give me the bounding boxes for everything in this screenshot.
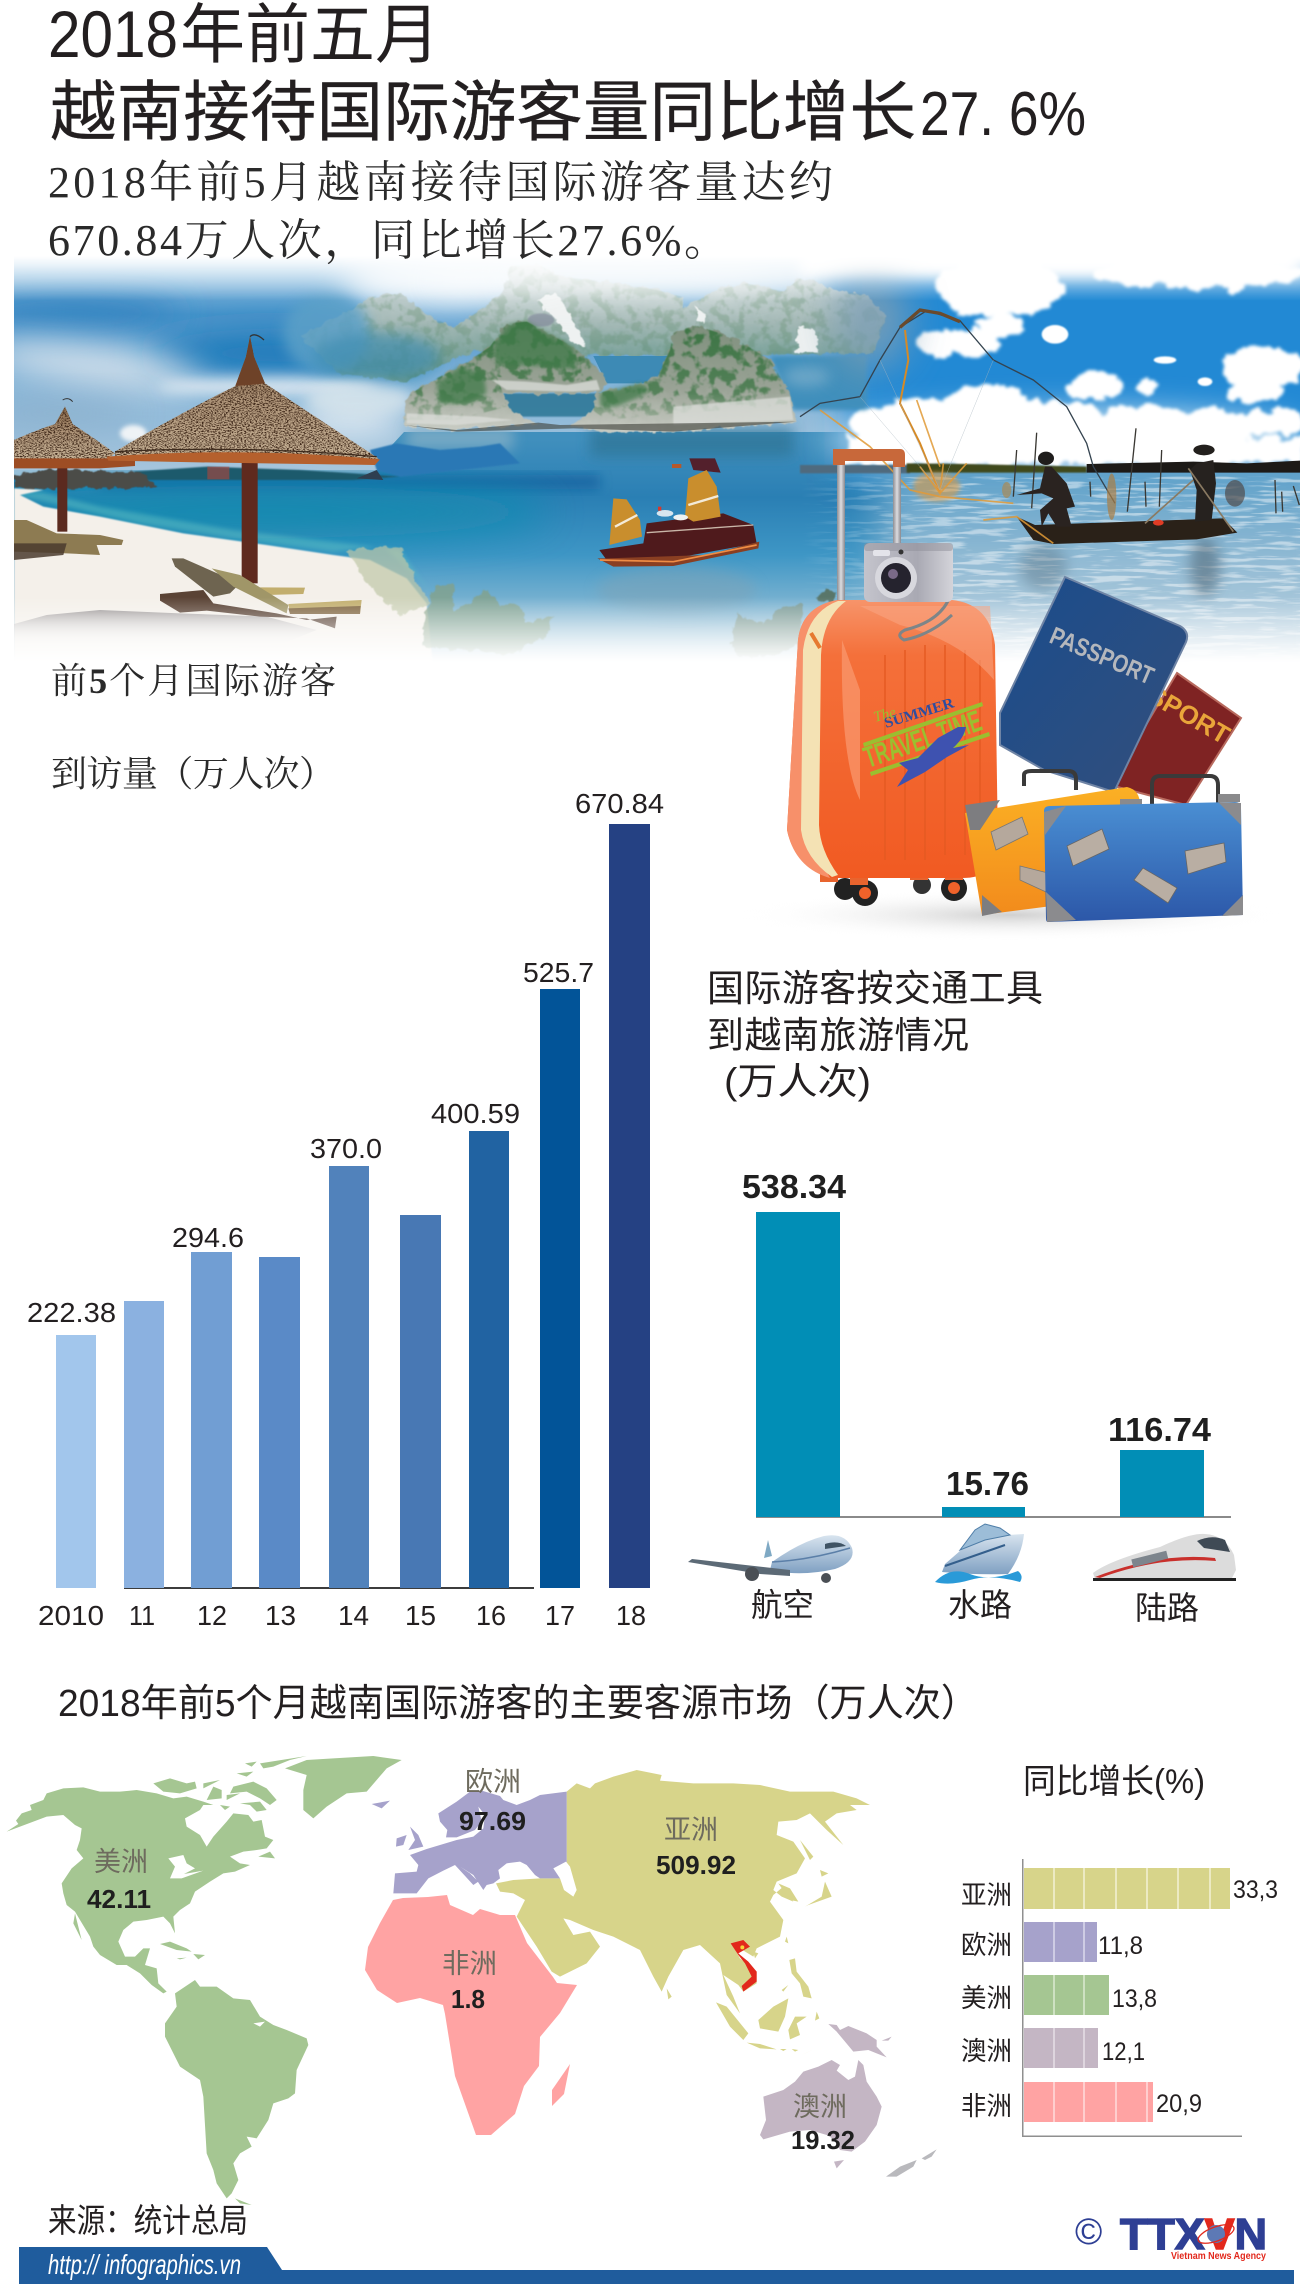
label: Oceania	[791, 2092, 855, 2155]
row: Europe: 11,8	[1098, 1932, 1143, 1960]
bar: land	[1108, 1411, 1212, 1517]
icon: airplane	[688, 1535, 853, 1583]
icon: small straw umbrella	[14, 399, 135, 560]
bar 2016	[431, 1098, 520, 1631]
sticker: summer travel time: SUMMER	[882, 695, 956, 732]
row: Asia: 33,3	[1233, 1876, 1278, 1904]
label: Asia	[656, 1815, 736, 1880]
sticker: summer travel time: The	[872, 704, 898, 726]
bar 2018: 670.84	[575, 788, 664, 819]
bar 2017: 17	[545, 1600, 575, 1631]
icon: large straw umbrella	[107, 335, 380, 628]
region: Americas and Iceland	[7, 1756, 402, 2205]
heading: left chart	[51, 661, 336, 794]
logo: TTXVN: TTXVN	[1120, 2210, 1267, 2259]
row: Africa: 非洲	[961, 2091, 1012, 2121]
bar 2013: 13	[265, 1600, 296, 1631]
sticker: summer travel time	[860, 695, 990, 787]
bar 2012	[172, 1222, 244, 1631]
label: Africa	[442, 1949, 497, 2014]
bar chart: arrivals per year	[27, 788, 664, 1631]
scene: right sky	[800, 237, 1300, 473]
region: Africa	[365, 1895, 577, 2135]
icon: limestone islands	[403, 322, 797, 457]
scene: sky and streaks left	[0, 298, 423, 442]
title: 年前五月	[180, 0, 440, 71]
logo: TTXVN: ©	[1075, 2211, 1102, 2252]
bar: water: 15.76	[946, 1465, 1029, 1502]
heading: transport chart	[707, 968, 1043, 1102]
bar: air	[742, 1168, 847, 1517]
scene: lake water right	[856, 470, 1300, 654]
source note: 来源：统计总局	[48, 2202, 248, 2239]
labels: transport names: 陆路	[1135, 1590, 1199, 1626]
bar 2017	[523, 957, 594, 1631]
labels: transport names: 航空	[751, 1587, 814, 1623]
label: Oceania: 澳洲	[793, 2092, 847, 2122]
bar 2015	[400, 1215, 441, 1631]
title: 越南接待国际游客量同比增长	[50, 75, 916, 149]
label: Americas: 42.11	[87, 1884, 151, 1914]
scene: karst mountains	[283, 263, 887, 417]
bar 2018: 18	[616, 1600, 646, 1631]
subtitle	[48, 158, 833, 265]
row: Europe: 欧洲	[961, 1930, 1012, 1960]
row: Africa: 20,9	[1156, 2090, 1202, 2118]
icon: red passport	[1098, 654, 1241, 805]
row: Oceania	[961, 2028, 1145, 2068]
icon: orange suitcase with handle and camera	[787, 449, 998, 906]
icon: blue hard case	[1044, 776, 1243, 922]
bar 2012: 12	[197, 1600, 227, 1631]
bar 2012: 294.6	[172, 1222, 244, 1253]
bar 2016: 16	[476, 1600, 506, 1631]
bar 2018	[575, 788, 664, 1631]
axis line	[124, 1587, 534, 1589]
footer banner: http:// infographics.vn	[48, 2249, 241, 2280]
label: Europe: 欧洲	[465, 1767, 521, 1797]
icon: blue passport: PASSPORT	[1046, 622, 1158, 691]
region: Europe and Asia	[393, 1770, 870, 2040]
sticker: summer travel time: TRAVEL TIME	[860, 705, 986, 775]
label: Americas: 美洲	[94, 1847, 148, 1877]
icon: foliage	[423, 583, 837, 657]
row: Americas: 美洲	[961, 1983, 1012, 2013]
heading: source markets: 2018年前5个月越南国际游客的主要客源市场（万人次）	[58, 1683, 978, 1725]
row: Europe	[961, 1922, 1143, 1962]
scene: beach sand	[14, 488, 433, 670]
scene: pale sky behind karst	[340, 250, 823, 310]
row: Africa	[961, 2082, 1202, 2122]
scene: sea	[14, 432, 914, 654]
bar 2014: 14	[338, 1600, 369, 1631]
row: Oceania: 澳洲	[961, 2036, 1012, 2066]
bar 2011: 11	[129, 1600, 155, 1631]
label: Asia: 509.92	[656, 1850, 736, 1880]
row: Oceania: 12,1	[1102, 2038, 1145, 2066]
subtitle: 2018年前5月越南接待国际游客量达约	[48, 158, 833, 207]
bar 2010	[27, 1297, 116, 1631]
bar: water	[942, 1465, 1029, 1517]
icon: blue passport	[1000, 577, 1187, 792]
label: Africa: 非洲	[442, 1949, 497, 1979]
label: Americas	[87, 1847, 151, 1914]
heading: transport chart: (万人次)	[724, 1061, 871, 1102]
label: Oceania: 19.32	[791, 2125, 855, 2155]
icon: train	[1093, 1534, 1236, 1581]
bar 2016: 400.59	[431, 1098, 520, 1129]
icon: orange hard case	[965, 771, 1140, 916]
title: 27. 6%	[920, 80, 1086, 149]
icon: red passport: PASSPORT	[1098, 654, 1235, 750]
row: Asia: 亚洲	[961, 1880, 1012, 1910]
icon: junk boat	[597, 458, 759, 613]
bar: land: 116.74	[1108, 1411, 1212, 1448]
label: Asia: 亚洲	[664, 1815, 718, 1845]
scene: haze at the karst right edge	[834, 270, 910, 370]
title	[48, 0, 1086, 149]
logo: TTXVN: Vietnam News Agency	[1171, 2250, 1266, 2262]
bar chart: arrivals by transport	[742, 1168, 1231, 1518]
icon: floor shadow under luggage	[740, 889, 1280, 941]
row: Americas	[961, 1975, 1157, 2015]
subtitle: 670.84万人次，同比增长27.6%。	[48, 216, 728, 265]
label: Europe: 97.69	[459, 1806, 526, 1836]
labels: transport names: 水路	[948, 1587, 1012, 1623]
heading: left chart: 前5个月国际游客	[51, 661, 336, 701]
bar 2010: 2010	[38, 1600, 104, 1631]
label: Africa: 1.8	[451, 1984, 485, 2014]
world map	[7, 1756, 937, 2205]
labels: transport names	[751, 1587, 1199, 1626]
heading: growth chart: 同比增长(%)	[1023, 1763, 1205, 1801]
bar chart: growth by region	[961, 1859, 1278, 2137]
icon: cruise ship	[935, 1524, 1024, 1584]
icon: fishing scene	[800, 310, 1300, 544]
panel: panoramic travel photo collage	[14, 260, 1300, 657]
icon: distant hills and horizon	[14, 443, 520, 489]
bar 2014	[310, 1133, 382, 1631]
bar: air: 538.34	[742, 1168, 847, 1205]
bar 2017: 525.7	[523, 957, 594, 988]
heading: transport chart: 到越南旅游情况	[707, 1015, 969, 1056]
bar 2011	[124, 1301, 164, 1631]
bar 2010: 222.38	[27, 1297, 116, 1328]
heading: left chart: 到访量（万人次）	[51, 754, 335, 794]
row: Asia	[961, 1868, 1278, 1910]
heading: transport chart: 国际游客按交通工具	[707, 968, 1043, 1009]
label: Europe	[459, 1767, 526, 1836]
footer banner	[19, 2247, 1294, 2284]
region: Vietnam	[731, 1940, 757, 1992]
bar 2014: 370.0	[310, 1133, 382, 1164]
bar 2013	[259, 1257, 300, 1631]
row: Americas: 13,8	[1112, 1985, 1157, 2013]
bar 2015: 15	[405, 1600, 436, 1631]
region: Oceania and Indonesia	[747, 2012, 937, 2177]
